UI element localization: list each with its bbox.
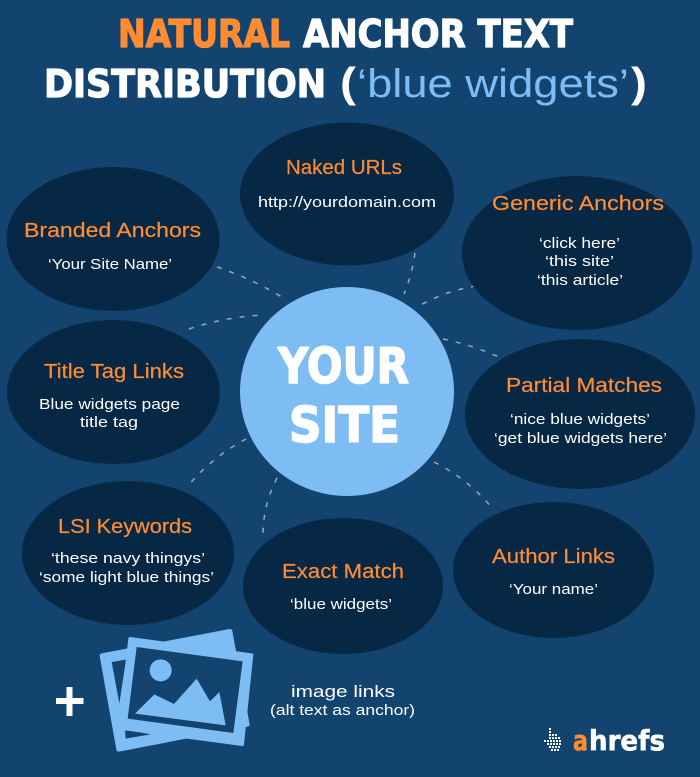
panel: generic anchors: ‘this article’ (537, 272, 623, 289)
central circle: your site: YOUR (277, 338, 409, 395)
panel: partial matches: ‘nice blue widgets’ (510, 411, 650, 428)
panel: branded anchors: Branded Anchors (24, 220, 201, 242)
panel: exact match (243, 518, 443, 654)
title: ( (340, 59, 356, 106)
central circle: your site (240, 287, 454, 496)
panel: LSI keywords: ‘these navy thingys’ (51, 550, 205, 567)
panel: naked URLs (240, 122, 454, 266)
panel: partial matches: Partial Matches (506, 375, 662, 397)
image links caption (270, 682, 415, 719)
panel: naked URLs: Naked URLs (286, 157, 402, 179)
panel: generic anchors: ‘this site’ (545, 253, 614, 270)
title: DISTRIBUTION (44, 62, 326, 106)
panel: branded anchors: ‘Your Site Name’ (48, 256, 172, 273)
panel: generic anchors: ‘click here’ (539, 235, 620, 252)
title: ANCHOR TEXT (303, 12, 573, 56)
panel: title tag links: title tag (80, 414, 138, 431)
ahrefs logo: a (573, 724, 588, 757)
panel: LSI keywords: ‘some light blue things’ (39, 569, 214, 586)
title: NATURAL (118, 12, 290, 56)
panel: partial matches: ‘get blue widgets here’ (494, 430, 667, 447)
panel: LSI keywords (22, 481, 234, 625)
dashed connector lines (187, 253, 499, 535)
panel: author links: ‘Your name’ (509, 581, 598, 598)
title (44, 12, 647, 106)
panel: author links: Author Links (492, 546, 615, 568)
panel: generic anchors (462, 176, 692, 330)
plus sign (56, 687, 84, 716)
ahrefs logo (544, 724, 665, 757)
panel: LSI keywords: LSI Keywords (58, 516, 192, 538)
panel: exact match: ‘blue widgets’ (290, 596, 392, 613)
title: ‘blue widgets’ (357, 62, 629, 106)
panel: title tag links: Blue widgets page (39, 396, 180, 413)
image links caption: image links (291, 682, 395, 701)
ahrefs logo: hrefs (589, 724, 665, 757)
panel: naked URLs: http://yourdomain.com (258, 194, 436, 211)
panel: title tag links: Title Tag Links (44, 361, 184, 383)
panel: exact match: Exact Match (282, 561, 404, 583)
central circle: your site: SITE (289, 397, 400, 454)
title: ) (631, 59, 647, 106)
panel: partial matches (465, 339, 695, 489)
panel: author links (453, 502, 654, 638)
panel: branded anchors (6, 167, 220, 311)
panel: generic anchors: Generic Anchors (492, 193, 664, 215)
image links caption: (alt text as anchor) (270, 702, 415, 719)
icon: image links photos (102, 631, 252, 749)
panel: title tag links (7, 320, 220, 464)
